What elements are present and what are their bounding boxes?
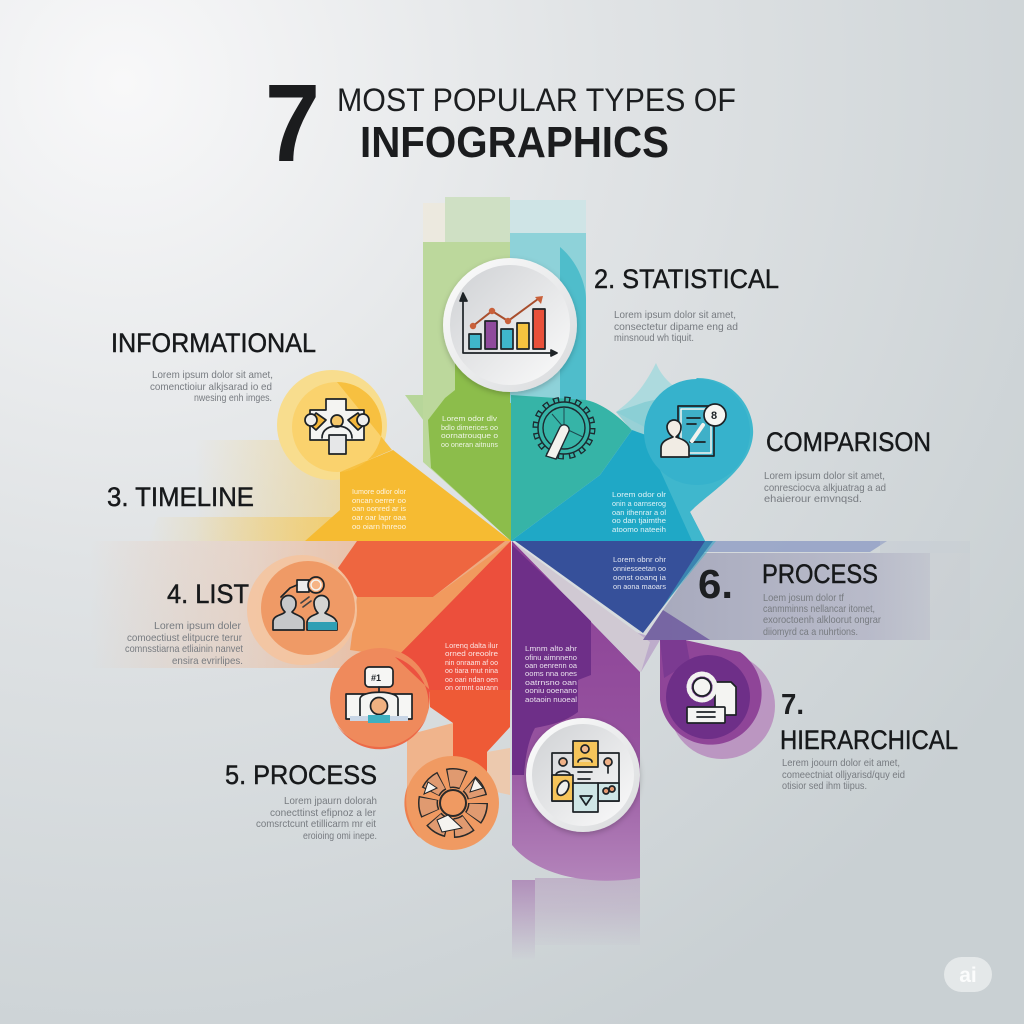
text: informational label [111,328,316,404]
text: green microtext: oornatrouque o [441,431,498,440]
text: hierarchical label: HIERARCHICAL [780,725,958,755]
text: list label: comnsstiarna etliainin nanvet [125,643,243,655]
text: cyan microtext [612,490,667,534]
text: process 5 label: 5. PROCESS [225,760,377,790]
text: green microtext [441,414,498,449]
text: statistical label: consectetur dipame eng ad [614,321,738,333]
text: statistical label [594,264,779,344]
text: cyan microtext: oan ithenrar a ol [612,508,666,517]
watermark badge [944,957,992,992]
text: yellow microtext: oncan oerrer oo [352,496,406,505]
panel: green informational segment [405,197,511,541]
text: process 6 label: exoroctoenh alkloorut ongrar [763,614,881,626]
text: purple microtext: Lmnm alto ahr [525,644,577,653]
text: cyan microtext: Lorem odor olr [612,490,667,499]
icon: hierarchical gear and file [687,674,736,723]
text: yellow microtext: oan oonred ar is [352,504,406,513]
text: process 5 label: comsrctcunt etillicarm mr eit [256,818,376,830]
text: list label: Lorem ipsum doler [154,620,242,632]
icon: process monitor: #1 [371,673,381,683]
text: process 6 label: PROCESS [762,559,878,589]
text: informational label: comenctioiur alkjsarad io ed [150,381,272,393]
icon: hierarchical disc [526,718,640,832]
text: navy microtext [613,555,667,591]
text: hierarchical label: otisior sed ihm tiipus. [782,780,867,792]
icon: comparison document: 8 [711,410,717,422]
title: INFOGRAPHICS [360,118,669,167]
text: process 5 label: eroioing omi inepe. [303,830,377,842]
text: hierarchical label: Lerem joourn dolor eit amet, [782,757,900,769]
panel: red process segment [330,541,511,850]
panel: navy process segment [515,541,970,640]
text: green microtext: Lorem odor dlv [442,414,497,423]
text: yellow microtext: oar oar lapr oaa [352,513,407,522]
text: hierarchical label: comeectniat olljyarisd/quy eid [782,769,905,781]
text: red microtext: nin onraam af oo [445,658,498,667]
icon: informational people [305,399,369,454]
text: list label: comoectiust elitpucre terur [127,632,242,644]
text: purple microtext: oan oenrenn oa [525,661,578,670]
text: statistical label: Lorem ipsum dolor sit amet, [614,309,736,321]
text: comparison label: Lorem ipsum dolor sit amet, [764,470,885,482]
text: comparison label: COMPARISON [766,427,931,457]
watermark badge: ai [959,964,977,987]
text: green microtext: bdlo dimerices oo [441,423,498,432]
text: purple microtext: oatrnsno oan [525,678,577,687]
text: process 5 label: Lorem jpaurn dolorah [284,795,377,807]
text: hierarchical label: 7. [781,689,804,721]
text: cyan microtext: oo dan tjaimthe [612,516,666,525]
text: yellow microtext [352,487,407,531]
title: 7 [265,62,320,185]
panel: yellow timeline segment [148,370,511,541]
icon: list people [273,577,337,630]
text: statistical label: minsnoud wh tiquit. [614,332,694,344]
text: red microtext: Lorenq dalta ilur [445,641,498,650]
text: process 6 label: canmminns nellancar itomet, [763,603,875,615]
text: purple microtext [525,644,578,704]
text: navy microtext: on aona maoars [613,582,666,591]
text: comparison label: ehaierour emvnqsd. [764,493,862,505]
panel: purple teardrop [660,640,775,759]
text: green microtext: oo oneran aitnuns [441,440,498,449]
text: process 6 label [698,559,881,638]
text: comparison label [764,427,931,505]
text: purple microtext: ooms nna ones [525,669,577,678]
text: yellow microtext: Iumore odlor olor [352,487,406,496]
text: cyan microtext: onin a oarnserog [612,499,666,508]
text: hierarchical label [780,689,958,792]
icon: gear [536,400,592,459]
text: process 5 label [225,760,377,842]
icon: statistical chart disc [443,258,577,392]
panel: purple hierarchical segment [512,541,660,960]
panel: orange list segment [90,541,511,668]
text: process 6 label: diiomyrd ca a nuhrtions. [763,626,858,638]
panel: cyan comparison segment [511,363,753,541]
text: process 6 label: Loem josum dolor tf [763,592,844,604]
text: red microtext: on ormnt oarann [445,683,498,692]
icon: comparison document [661,404,726,457]
text: process 5 label: conecttinst efipnoz a ler [270,807,376,819]
text: red microtext: oo oari ndan oen [445,675,498,684]
text: timeline label: 3. TIMELINE [107,482,254,512]
text: informational label: nwesing enh imges. [194,392,272,404]
text: red microtext [445,641,499,692]
icon: process monitor [346,667,412,723]
text: navy microtext: onniesseetan oo [613,564,666,573]
text: cyan microtext: atoomo nateeih [612,525,666,534]
icon: process broken gear [424,778,483,832]
text: red microtext: orned oreoolre [445,649,498,658]
text: comparison label: conresciocva alkjuatrag a ad [764,482,886,494]
text: red microtext: oo tiara rnut nina [445,666,499,675]
text: informational label: INFORMATIONAL [111,328,316,358]
text: list label: 4. LIST [167,579,249,609]
text: list label [125,579,249,667]
text: statistical label: 2. STATISTICAL [594,264,779,294]
panel: teal statistical segment [510,200,632,541]
text: yellow microtext: oo oiarn hnreoo [352,522,406,531]
text: purple microtext: aotaoin nuoeal [525,695,577,704]
text: navy microtext: Lorem obnr ohr [613,555,666,564]
text: process 6 label: 6. [698,561,733,607]
title: MOST POPULAR TYPES OF [337,82,736,118]
text: navy microtext: oonst ooanq ia [613,573,667,582]
title [265,62,736,185]
text: informational label: Lorem ipsum dolor sit amet, [152,369,273,381]
text: list label: ensira evrirlipes. [172,655,243,667]
text: purple microtext: ofinu aimnneno [525,653,577,662]
text: purple microtext: ooniu ooenano [525,686,577,695]
